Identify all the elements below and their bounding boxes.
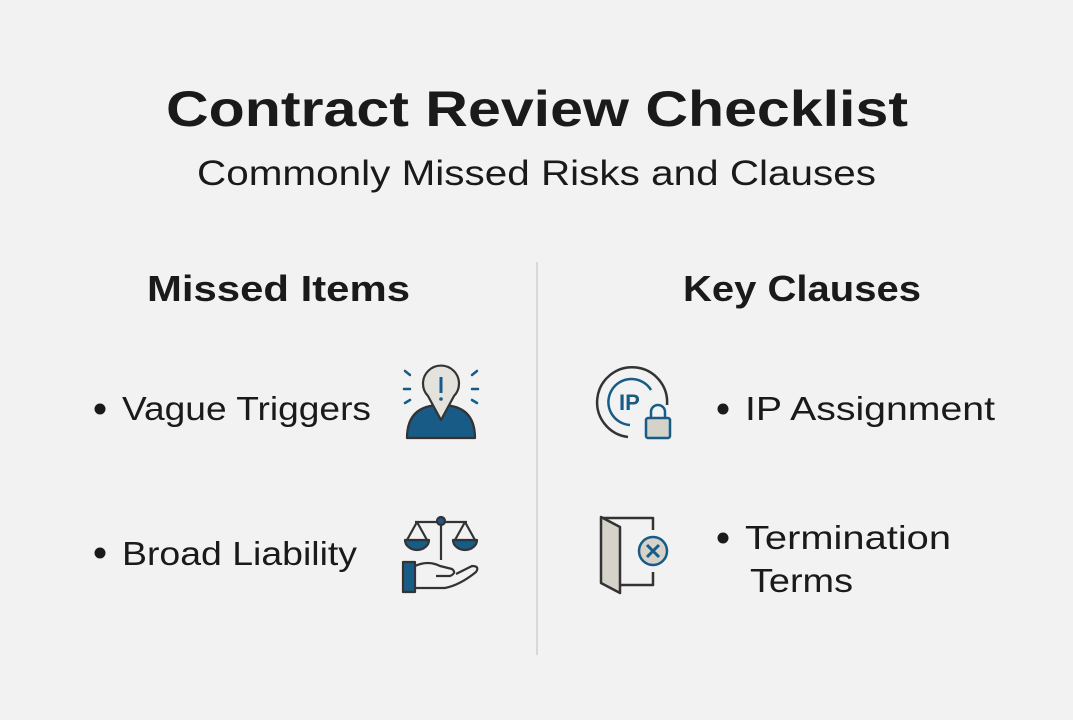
item: termination terms xyxy=(718,519,951,599)
icon: IP lock xyxy=(597,367,670,438)
icon: person alert xyxy=(404,366,478,438)
item: termination terms: Terms xyxy=(750,562,853,599)
panel: missed items xyxy=(94,268,478,592)
item: IP assignment: IP Assignment xyxy=(745,390,995,427)
panel: key clauses xyxy=(597,268,995,599)
icon: IP lock: IP xyxy=(619,390,640,415)
item: vague triggers: Vague Triggers xyxy=(122,390,371,427)
heading: key clauses: Key Clauses xyxy=(683,268,921,309)
title: Contract Review Checklist xyxy=(166,81,908,137)
subtitle: Commonly Missed Risks and Clauses xyxy=(197,154,876,193)
icon: door exit xyxy=(601,517,667,593)
heading: missed items: Missed Items xyxy=(147,268,410,309)
icon: scales and hand xyxy=(403,517,477,592)
item: termination terms: Termination xyxy=(745,519,951,556)
item: broad liability: Broad Liability xyxy=(122,535,358,572)
